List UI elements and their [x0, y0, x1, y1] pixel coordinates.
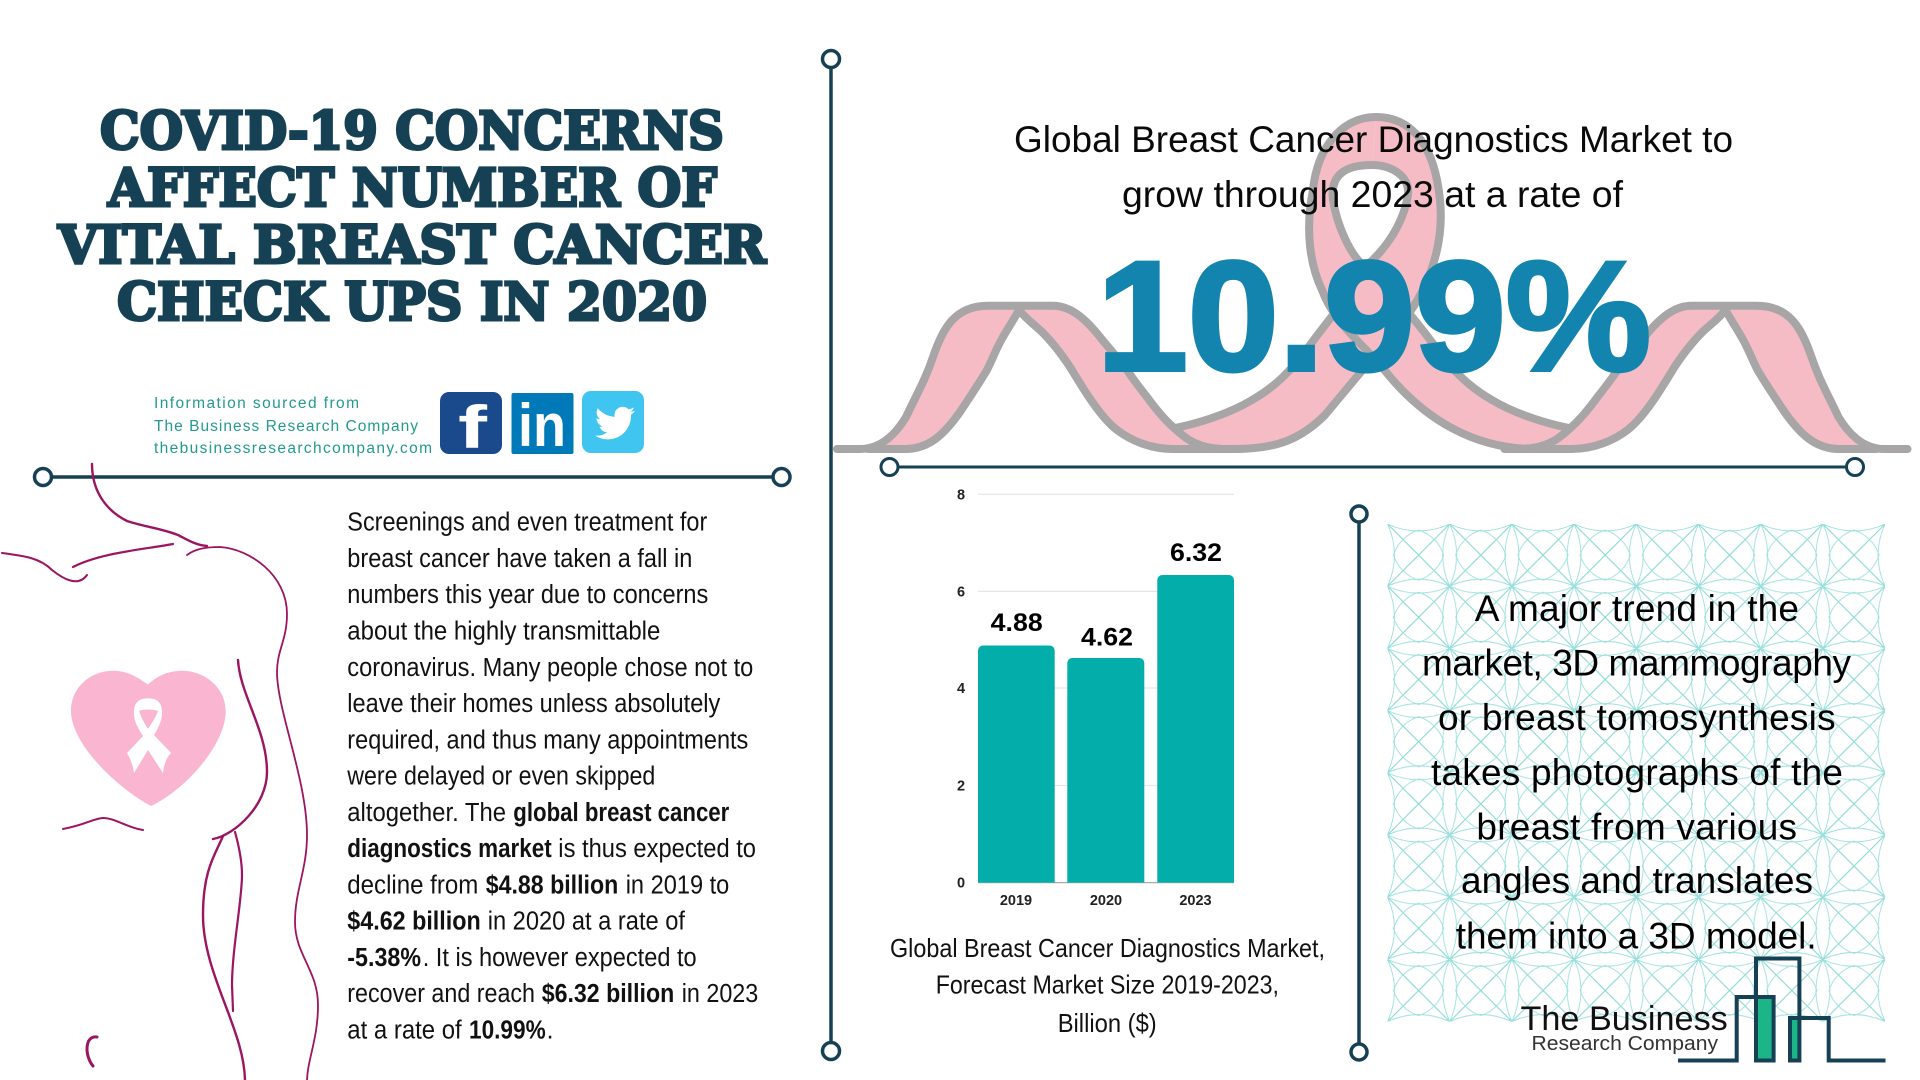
body text: in 2023 — [682, 980, 758, 1008]
body text: required, and thus many appointments — [347, 726, 748, 754]
title — [57, 101, 767, 333]
body text: $4.62 billion — [347, 908, 481, 936]
chart caption: Global Breast Cancer Diagnostics Market, — [890, 933, 1325, 963]
body text: in 2020 at a rate of — [488, 908, 686, 936]
source attribution — [154, 395, 432, 457]
icon: facebook — [440, 392, 502, 461]
body text: is thus expected to — [558, 835, 756, 863]
body text: . It is however expected to — [423, 944, 697, 972]
body text: global breast cancer — [513, 799, 729, 827]
body text: decline from — [347, 871, 478, 899]
title: CHECK UPS IN 2020 — [117, 272, 707, 333]
body text: . — [546, 1016, 554, 1044]
callout text: 3D mammography trend: breast from various — [1476, 807, 1797, 848]
body text: coronavirus. Many people chose not to — [347, 654, 753, 682]
body text: -5.38% — [347, 944, 421, 972]
connector: right vertical — [1351, 506, 1367, 1060]
big number: growth rate: 10.99% — [1097, 230, 1651, 404]
callout text: 3D mammography trend — [1422, 588, 1852, 956]
title: VITAL BREAST CANCER — [57, 215, 767, 276]
body text: 10.99% — [469, 1016, 546, 1044]
bar chart: market size: 0 — [957, 876, 965, 892]
callout text: 3D mammography trend: or breast tomosynthesis — [1438, 697, 1836, 738]
bar chart: market size: 6 — [957, 584, 965, 600]
bar chart: market size — [957, 488, 1234, 909]
chart caption — [890, 933, 1325, 1038]
icon: twitter — [582, 391, 644, 453]
body text: were delayed or even skipped — [346, 763, 655, 791]
connector: ribbon underline — [881, 458, 1864, 476]
body text: recover and reach — [347, 980, 535, 1008]
bar chart: market size: 2020 — [1090, 893, 1122, 909]
icon: facebook: f — [458, 394, 488, 461]
heading: market growth — [1014, 119, 1733, 215]
source attribution: The Business Research Company — [154, 418, 418, 435]
logo: The Business Research Company — [1520, 958, 1886, 1060]
bar chart: market size: 8 — [957, 488, 965, 504]
bar chart: market size: 4.88 — [991, 609, 1043, 637]
illustration: body outline — [2, 464, 318, 1080]
source attribution: thebusinessresearchcompany.com — [154, 440, 432, 457]
body text: $6.32 billion — [542, 980, 674, 1008]
body text: numbers this year due to concerns — [347, 581, 708, 609]
body text: $4.88 billion — [486, 871, 618, 899]
logo: The Business Research Company: Research Company — [1532, 1033, 1718, 1055]
connector: left horizontal — [34, 468, 790, 486]
illustration: pink ribbon — [837, 117, 1908, 449]
callout text: 3D mammography trend: angles and translates — [1461, 860, 1813, 901]
title: AFFECT NUMBER OF — [107, 158, 717, 219]
bar chart: market size: 4 — [957, 681, 965, 697]
bar chart: market size: 2019 — [1000, 893, 1032, 909]
bar chart: market size: 2 — [957, 778, 965, 794]
callout text: 3D mammography trend: takes photographs of the — [1431, 752, 1843, 793]
bar chart: market size: 4.62 — [1081, 624, 1133, 652]
body text: about the highly transmittable — [347, 618, 660, 646]
body text: leave their homes unless absolutely — [347, 690, 721, 718]
source attribution: Information sourced from — [154, 395, 359, 412]
icon: linkedin: in — [518, 392, 566, 459]
bar chart: market size: 6.32 — [1170, 539, 1222, 567]
heading: market growth: Global Breast Cancer Diagnostics Market to — [1014, 119, 1733, 160]
icon: heart with ribbon — [71, 671, 226, 806]
body text: breast cancer have taken a fall in — [347, 545, 692, 573]
bar chart: market size: 2023 — [1179, 893, 1212, 909]
body text: altogether. The — [347, 799, 506, 827]
title: COVID-19 CONCERNS — [100, 101, 724, 162]
callout text: 3D mammography trend: A major trend in the — [1475, 588, 1799, 629]
logo: The Business Research Company: The Business — [1520, 1000, 1728, 1038]
chart caption: Forecast Market Size 2019-2023, — [936, 970, 1279, 1000]
panel: patterned trend callout — [1388, 524, 1885, 1022]
body text: Screenings and even treatment for — [347, 509, 708, 537]
chart caption: Billion ($) — [1058, 1008, 1157, 1038]
body text: in 2019 to — [626, 871, 729, 899]
heading: market growth: grow through 2023 at a rate of — [1122, 174, 1624, 215]
body text — [346, 509, 758, 1044]
body text: at a rate of — [347, 1016, 463, 1044]
body text: diagnostics market — [347, 835, 552, 863]
callout text: 3D mammography trend: market, 3D mammography — [1422, 643, 1852, 684]
callout text: 3D mammography trend: them into a 3D model. — [1456, 915, 1817, 956]
connector: centre vertical — [822, 50, 840, 1060]
